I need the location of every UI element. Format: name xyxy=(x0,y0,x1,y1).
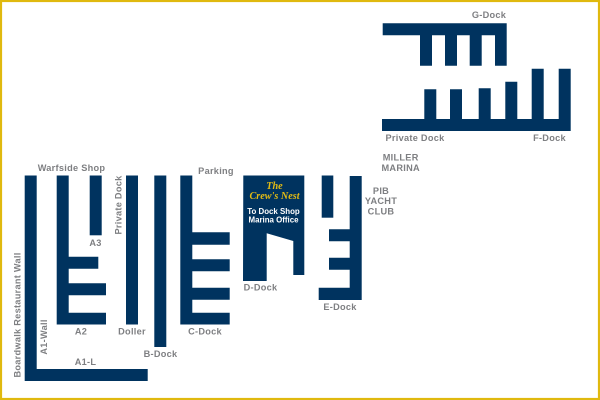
label: Boardwalk Restaurant Wall: Boardwalk Restaurant Wall xyxy=(12,252,22,378)
label: The Crew's Nest: The xyxy=(266,181,283,192)
label: To Dock Shop Marina Office: Marina Office xyxy=(248,215,299,224)
dock: G-Dock xyxy=(383,23,507,66)
label: Doller: Doller xyxy=(118,326,146,336)
label: E-Dock: E-Dock xyxy=(323,302,357,312)
label: Parking: Parking xyxy=(198,166,234,176)
dock: C-Dock xyxy=(180,176,230,324)
dock: E-Dock xyxy=(319,176,362,300)
label: A1-Wall: A1-Wall xyxy=(39,319,49,355)
dock: Doller xyxy=(126,176,138,324)
dock: D-Dock xyxy=(243,176,304,281)
label: Private Dock vertical: Private Dock xyxy=(114,175,124,235)
label: D-Dock: D-Dock xyxy=(244,282,278,292)
dock: B-Dock xyxy=(154,176,166,347)
label: Miller Marina: MARINA xyxy=(381,163,420,173)
label: F-Dock: F-Dock xyxy=(533,133,567,143)
label: Private Dock north: Private Dock xyxy=(386,133,445,143)
label: PIB Yacht Club: PIB xyxy=(373,186,389,196)
label: To Dock Shop Marina Office: To Dock Shop xyxy=(247,207,300,216)
label: PIB Yacht Club: YACHT xyxy=(365,196,397,206)
label: C-Dock: C-Dock xyxy=(188,326,223,336)
dock: A3 xyxy=(90,176,102,235)
label: G-Dock: G-Dock xyxy=(472,10,507,20)
label: A1-L: A1-L xyxy=(75,357,96,367)
dock: E-Dock short section xyxy=(322,176,333,218)
label: The Crew's Nest: Crew's Nest xyxy=(249,191,301,202)
label: A3: A3 xyxy=(89,238,102,248)
panel: north docks xyxy=(382,23,571,131)
panel: west docks xyxy=(25,176,230,381)
panel: central docks xyxy=(243,176,362,300)
label: A2: A2 xyxy=(75,326,87,336)
dock: F-Dock and Private Dock xyxy=(382,69,571,131)
label: B-Dock: B-Dock xyxy=(144,349,178,359)
dock: A1 wall and A1-L xyxy=(25,176,148,381)
label: PIB Yacht Club: CLUB xyxy=(368,206,394,216)
label: Miller Marina: MILLER xyxy=(383,152,419,162)
label: Warfside Shop: Warfside Shop xyxy=(38,163,105,173)
dock: A2 xyxy=(57,176,106,324)
